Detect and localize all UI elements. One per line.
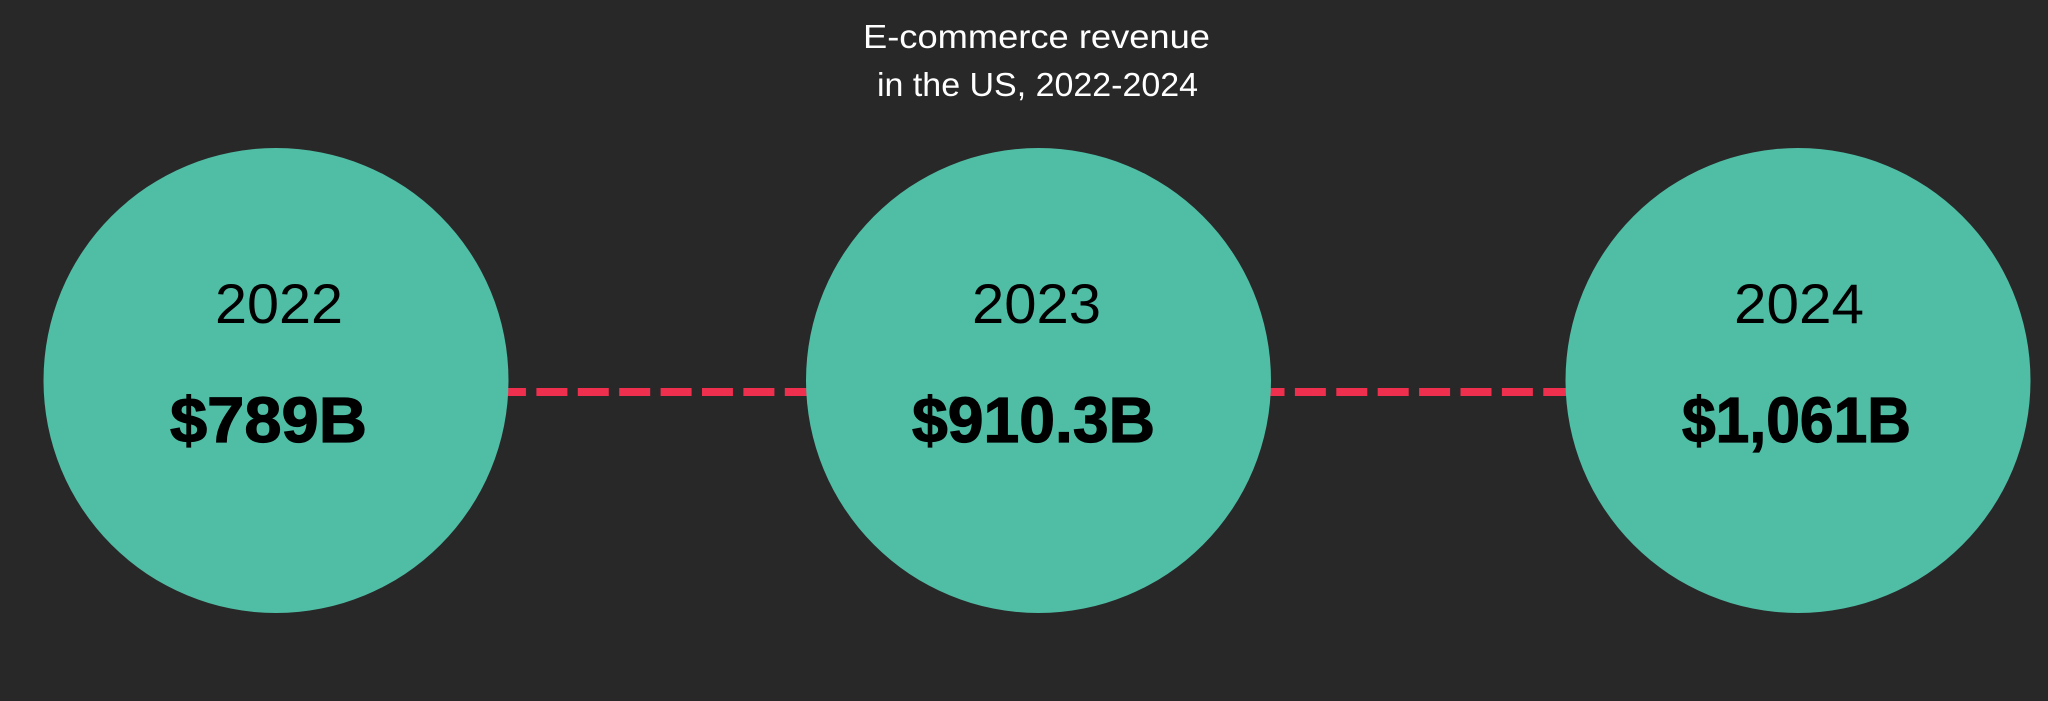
title: E-commerce revenue xyxy=(863,18,1210,55)
circle: 2022 xyxy=(44,148,508,613)
circle: 2023 xyxy=(806,148,1271,613)
circle: 2024 xyxy=(1566,148,2030,613)
year label: 2024: 2024 xyxy=(1734,272,1864,335)
year label: 2023: 2023 xyxy=(972,272,1101,335)
connector: 2022 to 2023 xyxy=(495,388,825,396)
title: in the US, 2022-2024 xyxy=(877,66,1198,103)
revenue value: 2022: $789B xyxy=(170,384,367,456)
revenue value: 2023: $910.3B xyxy=(912,384,1155,456)
revenue value: 2024: $1,061B xyxy=(1682,384,1911,456)
title xyxy=(863,18,1210,103)
connector: 2023 to 2024 xyxy=(1254,388,1584,396)
year label: 2022: 2022 xyxy=(215,272,343,335)
